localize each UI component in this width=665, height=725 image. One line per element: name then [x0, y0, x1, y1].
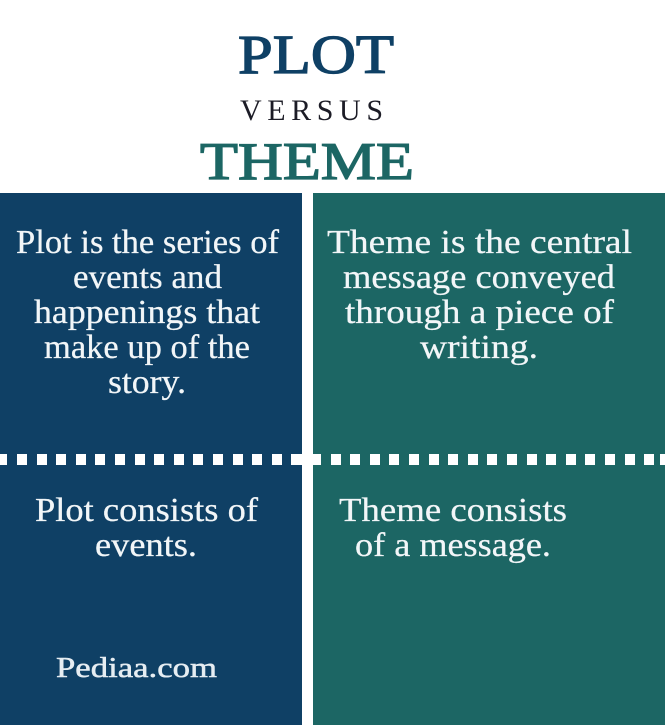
panel: theme — [313, 193, 665, 725]
watermark: Pediaa.com: Pediaa.com — [56, 652, 218, 684]
text: theme definition: message conveyed — [343, 259, 615, 296]
text: plot consists of: events. — [95, 527, 197, 564]
text: plot consists of: Plot consists of — [35, 492, 259, 529]
title: plot: PLOT — [238, 24, 394, 85]
text: theme definition: Theme is the central — [327, 224, 632, 261]
subtitle: versus: VERSUS — [240, 94, 383, 127]
text: plot definition: events and — [73, 259, 222, 296]
text: plot definition: story. — [108, 364, 186, 401]
text: plot consists of — [35, 492, 259, 564]
text: plot definition — [16, 224, 280, 401]
text: theme definition: through a piece of — [345, 294, 615, 331]
text: plot definition: happenings that — [34, 294, 261, 331]
text: plot definition: Plot is the series of — [16, 224, 280, 261]
text: theme definition — [327, 224, 632, 366]
text: theme definition: writing. — [420, 329, 538, 366]
title: theme: THEME — [200, 133, 414, 191]
dotted divider — [0, 454, 665, 465]
text: theme consists of: Theme consists — [339, 492, 567, 529]
text: theme consists of: of a message. — [355, 527, 551, 564]
text: theme consists of — [339, 492, 567, 564]
text: plot definition: make up of the — [44, 329, 250, 366]
panel: plot — [0, 193, 302, 725]
